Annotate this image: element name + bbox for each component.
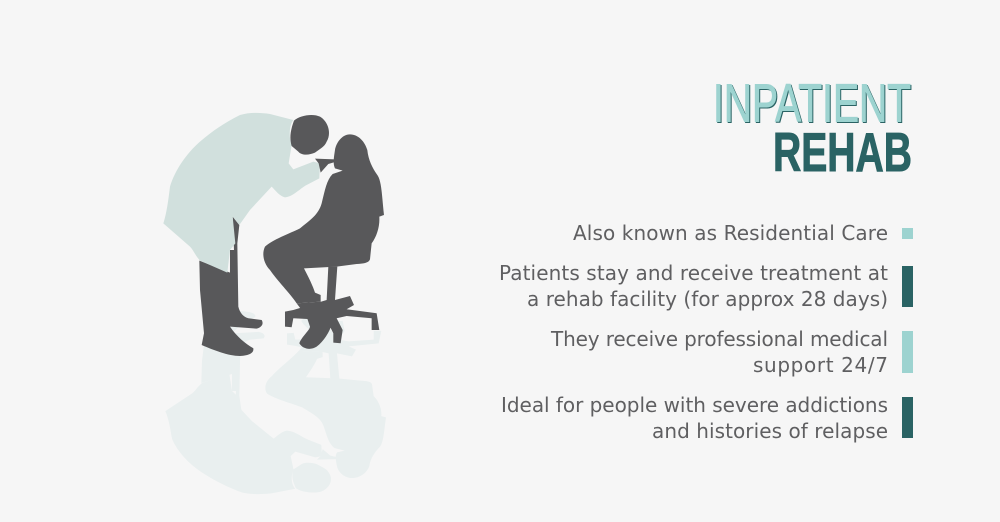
list item: stay at facility [499, 261, 913, 311]
doctor head [290, 115, 329, 155]
title line: REHAB: REHAB [773, 121, 912, 183]
doctor legs and shoes [199, 217, 263, 356]
title line: INPATIENT: INPATIENT [713, 74, 911, 134]
marker [902, 228, 913, 239]
office chair [285, 267, 379, 343]
marker [902, 331, 913, 373]
marker [902, 397, 913, 438]
list item: stay at facility: Patients stay and receive treatment at [499, 261, 888, 285]
title line: INPATIENT: INPATIENT [714, 74, 912, 134]
doctor hand and instrument [315, 159, 335, 173]
reflection of doctor and patient [165, 311, 386, 494]
list item: residential care: Also known as Residential Care [573, 221, 888, 245]
list item: ideal for: Ideal for people with severe addictions [501, 393, 888, 417]
list item: stay at facility: a rehab facility (for approx 28 days) [527, 287, 888, 311]
list item: ideal for: and histories of relapse [652, 419, 888, 443]
list item: medical support [550, 327, 913, 377]
title [713, 74, 912, 183]
patient body [263, 134, 384, 303]
list item: medical support: They receive professional medical [550, 327, 888, 351]
patient lower leg and shoe [297, 302, 332, 349]
list item: medical support: support 24/7 [753, 353, 888, 377]
doctor lab coat [163, 113, 320, 273]
illustration: doctor examining seated patient [163, 113, 384, 356]
marker [902, 266, 913, 307]
list item: ideal for [501, 393, 913, 443]
